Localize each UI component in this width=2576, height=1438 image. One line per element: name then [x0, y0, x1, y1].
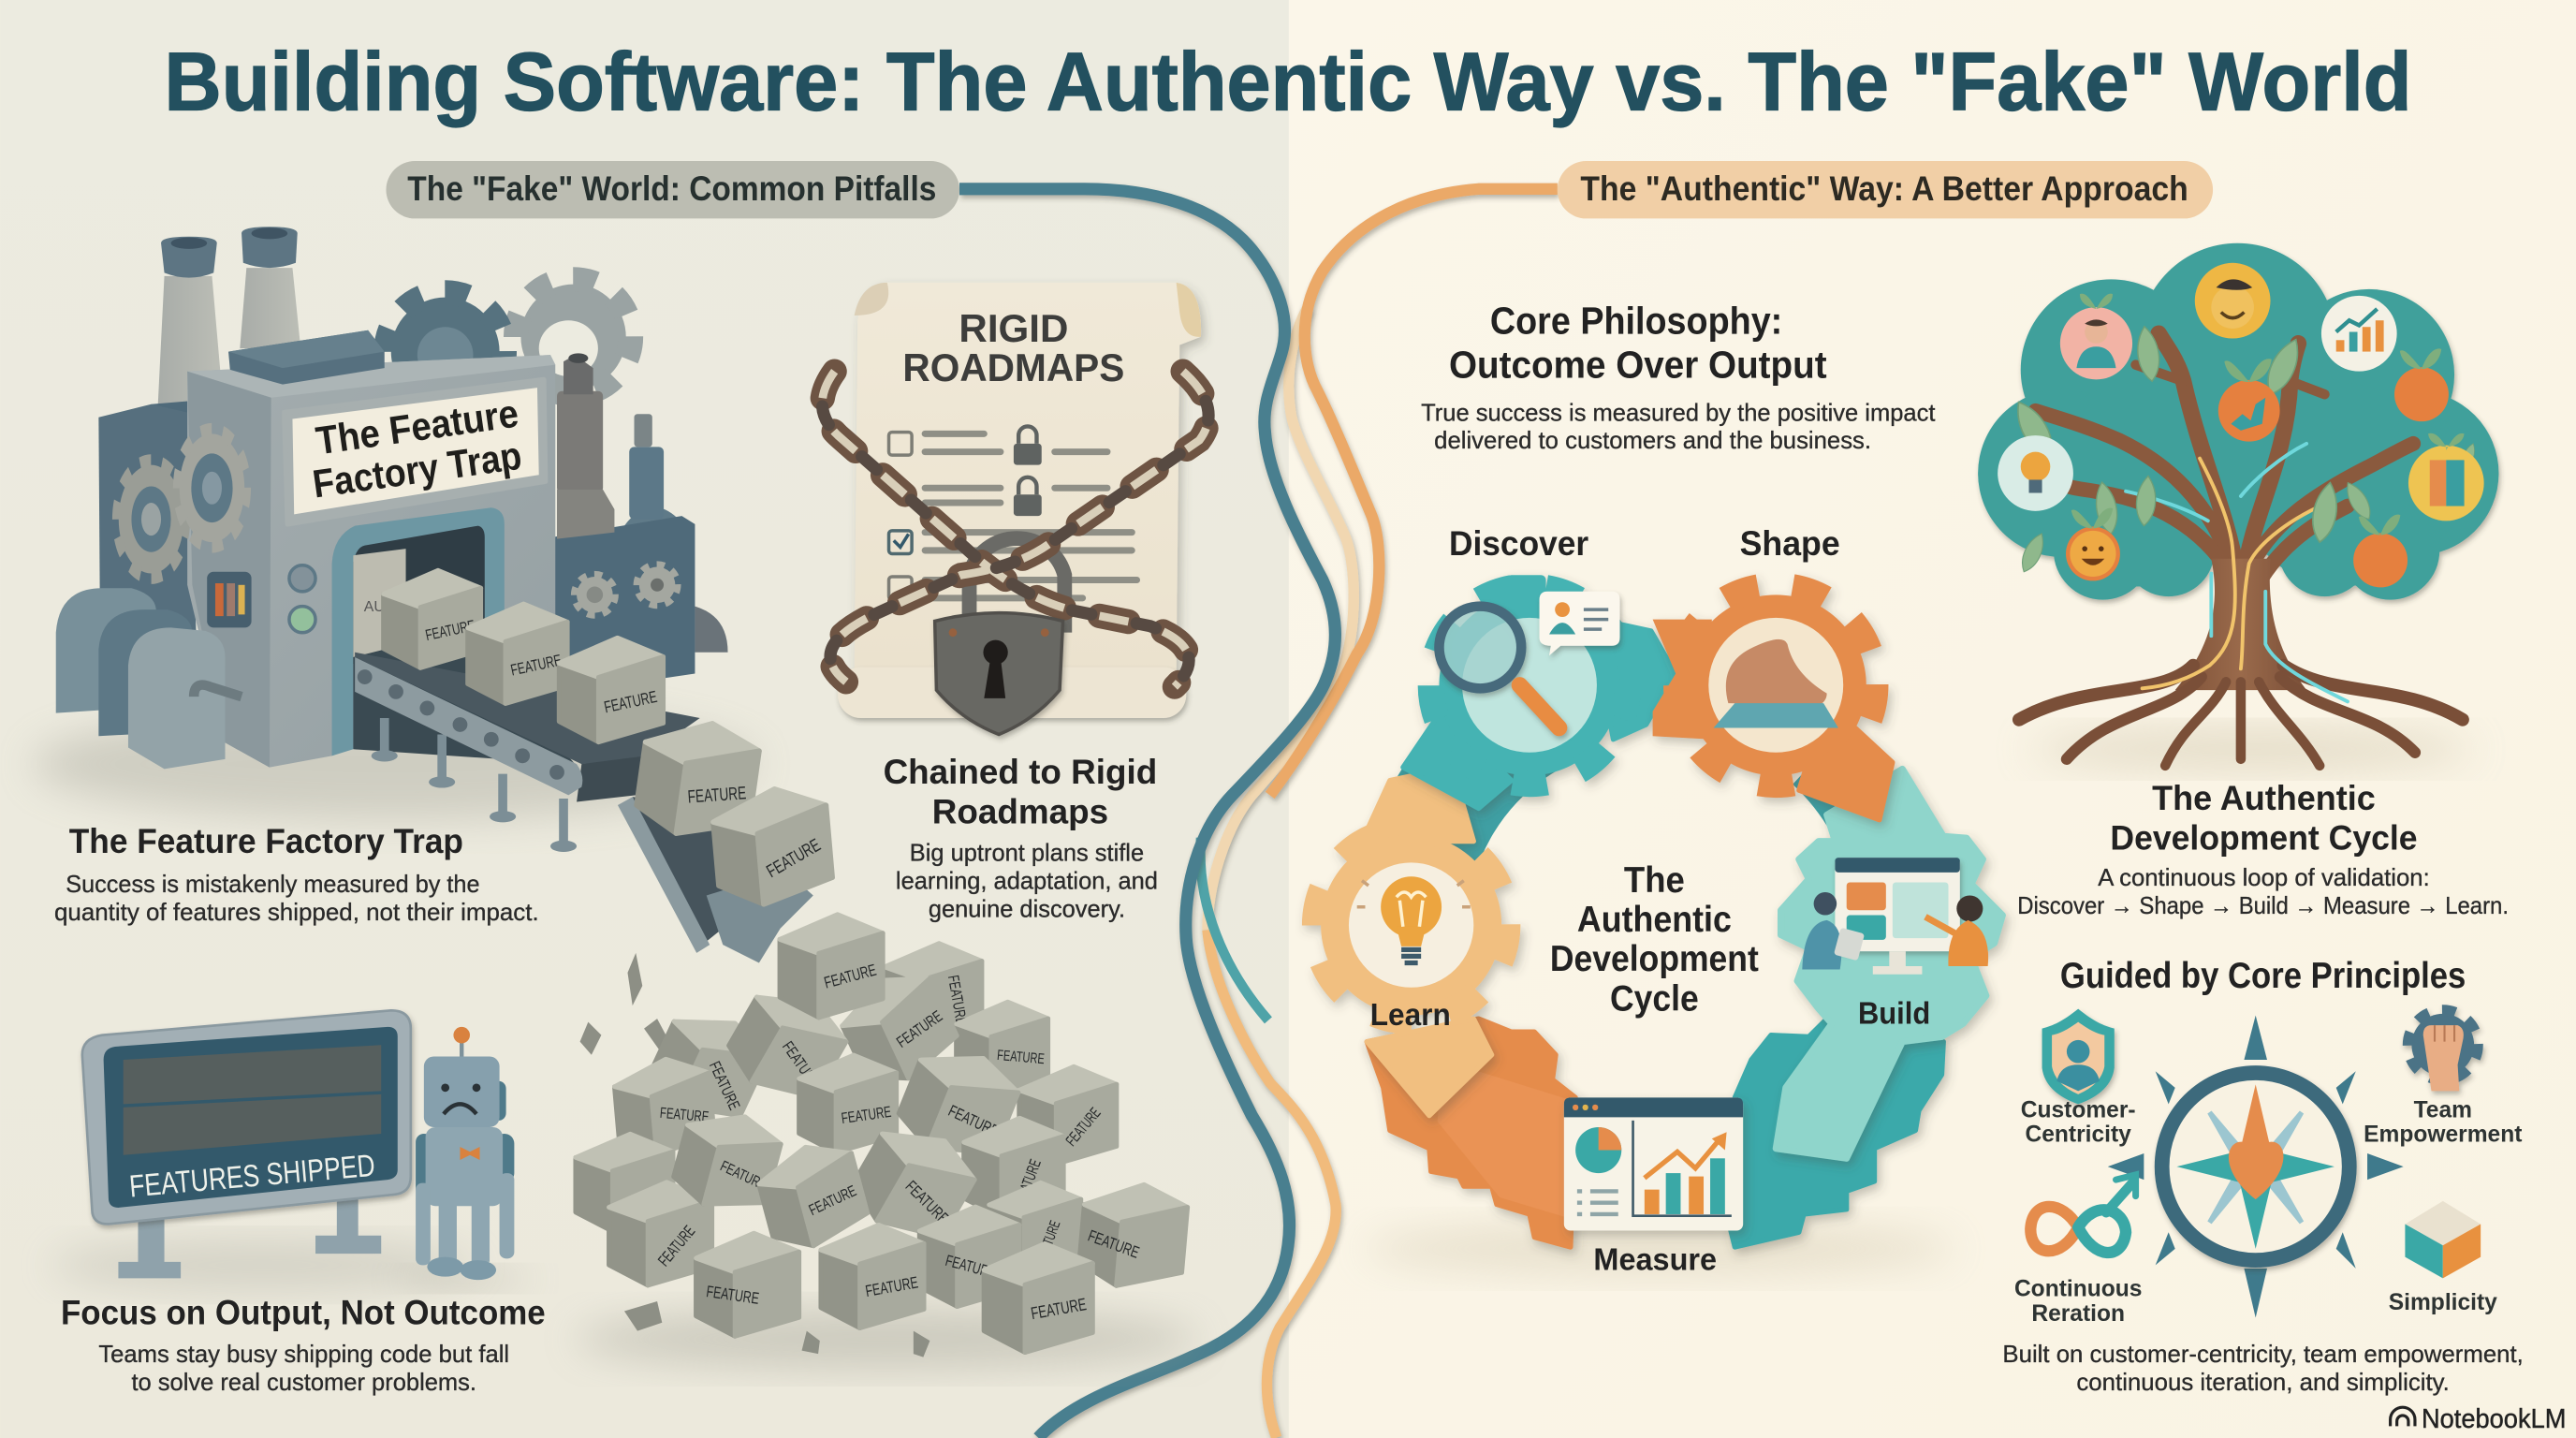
cube: FEATURE — [944, 1252, 998, 1282]
cube — [1077, 1180, 1189, 1291]
cube: FEATURE — [718, 1158, 769, 1194]
label: customer centricity: Customer- — [2021, 1097, 2136, 1123]
illustration: features shipped board — [50, 1010, 476, 1290]
cube — [885, 944, 982, 1041]
body: focus on output: Teams stay busy shipping code but fall — [98, 1342, 509, 1368]
tree leaves — [2009, 325, 2478, 575]
cube — [576, 1134, 673, 1231]
body: core philosophy: True success is measured by the positive impact — [1421, 400, 1935, 426]
back gears — [386, 279, 631, 411]
fruit: light bulb — [1998, 435, 2073, 511]
cube — [668, 1103, 785, 1220]
cube: FEATURE — [659, 1105, 710, 1125]
cube: FEATURE — [1062, 1104, 1105, 1150]
cube — [642, 1000, 775, 1132]
gear: build — [1776, 769, 2002, 1158]
board caption: FEATURES SHIPPED — [128, 1149, 376, 1205]
cube — [696, 1233, 799, 1336]
icon: simplicity cube — [2405, 1201, 2481, 1278]
label: team empowerment: Team — [2414, 1097, 2472, 1123]
cube — [984, 1244, 1092, 1352]
body: focus on output — [98, 1342, 509, 1396]
body: rigid roadmaps: learning, adaptation, and — [896, 868, 1158, 894]
cube: FEATURE — [1030, 1294, 1088, 1323]
cube: FEATURE — [706, 1059, 743, 1113]
factory sign: The Feature — [314, 391, 521, 462]
body: feature factory trap — [54, 872, 539, 926]
heading: core philosophy: Outcome Over Output — [1449, 344, 1827, 387]
cycle centre label: Cycle — [1610, 978, 1699, 1019]
illustration: sad robot — [400, 1027, 531, 1288]
cube: FEATURE — [996, 1048, 1045, 1067]
factory sign: Factory Trap — [310, 433, 524, 506]
cube: FEATURE — [779, 1038, 823, 1091]
heading: focus on output: Focus on Output, Not Outcome — [61, 1294, 546, 1332]
falling cube — [710, 785, 834, 908]
label: build: Build — [1858, 996, 1930, 1031]
debris — [580, 953, 929, 1357]
heading: authentic development cycle: Development Cycle — [2110, 818, 2418, 857]
cycle centre label: Development — [1550, 939, 1759, 979]
shackle — [970, 538, 1064, 633]
body: authentic development cycle — [2017, 865, 2509, 919]
illustration: feature factory — [33, 227, 755, 852]
conveyor belt — [355, 653, 700, 852]
gear: learn — [1316, 768, 1506, 1116]
cube on belt — [559, 638, 664, 742]
heading pill: fake world — [386, 161, 959, 218]
label: team empowerment — [2364, 1097, 2522, 1148]
ring base — [1412, 723, 1935, 929]
body: focus on output: to solve real customer problems. — [131, 1370, 476, 1396]
heading pill: authentic way — [1558, 161, 2213, 218]
cube: FEATURE — [893, 1007, 945, 1051]
cube — [1019, 1066, 1117, 1164]
cube — [799, 1055, 897, 1152]
body: feature factory trap: Success is mistakenly measured by the — [66, 872, 480, 898]
falling cube: FEATURE — [687, 783, 747, 808]
fruit: smiling customer — [2195, 263, 2271, 339]
cube on belt: FEATURE — [602, 687, 659, 716]
fruit: plain orange — [2394, 348, 2449, 421]
label: shape: Shape — [1740, 524, 1840, 563]
notebooklm logo: NotebookLM — [2422, 1404, 2566, 1434]
gear: discover — [1403, 575, 1676, 808]
checklist rows — [889, 431, 1140, 601]
body: rigid roadmaps: genuine discovery. — [929, 896, 1125, 922]
gear: shape — [1653, 587, 1893, 820]
tree canopy — [1978, 243, 2498, 600]
icon: customer shield — [2042, 1009, 2115, 1104]
heading: authentic development cycle — [2110, 779, 2418, 857]
cube — [891, 1036, 1025, 1171]
cube on belt — [384, 570, 481, 668]
connector: pale tan curve — [1208, 307, 1354, 930]
heading: guided by core principles: Guided by Core Principles — [2060, 956, 2466, 996]
label: measure: Measure — [1593, 1243, 1717, 1278]
small lock icons — [1014, 426, 1042, 516]
icon: continuous iteration infinity — [2030, 1175, 2136, 1253]
falling cube: FEATURE — [763, 835, 825, 882]
background: fake world half — [0, 0, 1289, 1438]
cube: FEATURE — [841, 1103, 892, 1127]
cube — [832, 961, 964, 1094]
illustration: rigid roadmap scroll — [822, 283, 1208, 734]
top block — [228, 330, 385, 385]
heading: core philosophy: Core Philosophy: — [1490, 299, 1782, 342]
body: principles summary: Built on customer-centricity, team empowerment, — [2002, 1342, 2524, 1368]
title: Building Software: The Authentic Way vs. The "Fake" World — [165, 37, 2411, 128]
side block — [98, 404, 198, 657]
cube on belt — [468, 604, 567, 704]
tree roots — [2019, 666, 2463, 766]
icon: magnifier and profile bubble — [1439, 592, 1620, 727]
body: core philosophy: delivered to customers and the business. — [1434, 428, 1871, 454]
background: authentic way half — [1289, 0, 2576, 1438]
ring segment: teal lower right — [1730, 1019, 1943, 1247]
icon: monitor and team — [1802, 858, 1988, 975]
icon: clay blob — [1714, 639, 1838, 727]
fruit: growth chart — [2321, 296, 2397, 372]
cube — [609, 1182, 712, 1285]
heading: chained to rigid roadmaps: Roadmaps — [932, 792, 1108, 830]
arches — [56, 588, 242, 769]
fruit: customer person — [2060, 294, 2132, 379]
roadmap title line two: ROADMAPS — [902, 345, 1124, 389]
cube — [612, 1055, 716, 1159]
padlock — [935, 613, 1063, 734]
connector: teal sliver — [1200, 838, 1268, 1020]
label: continuous reration: Continuous — [2014, 1277, 2142, 1302]
heading: feature factory trap: The Feature Factory Trap — [69, 822, 463, 860]
label: discover: Discover — [1449, 524, 1588, 563]
cycle centre label: The — [1624, 860, 1685, 901]
cube — [988, 1182, 1081, 1274]
label: customer centricity — [2021, 1097, 2136, 1148]
cube: FEATURE — [705, 1282, 760, 1308]
right pipes and block — [552, 353, 728, 690]
cube — [753, 1136, 872, 1255]
cube — [964, 1118, 1063, 1218]
illustration: growth tree — [1978, 243, 2498, 769]
illustration: compass — [2108, 1016, 2404, 1318]
factory door — [332, 507, 575, 764]
cube — [780, 915, 883, 1018]
cycle centre label — [1550, 860, 1759, 1019]
cube — [843, 1112, 984, 1253]
tree trunk — [2175, 559, 2306, 690]
indicator panel and buttons — [207, 565, 315, 633]
cube on belt: FEATURE — [509, 652, 564, 680]
body: authentic development cycle: Discover → Shape → Build → Measure → Learn. — [2017, 893, 2509, 919]
chains — [822, 372, 1208, 687]
icon: measure dashboard card — [1564, 1097, 1743, 1231]
cube: FEATURE — [1086, 1226, 1142, 1262]
roadmap title: RIGID — [959, 306, 1068, 350]
heading pill: authentic way: The "Authentic" Way: A Better Approach — [1580, 169, 2188, 208]
body: principles summary — [2002, 1342, 2524, 1396]
cube: FEATURE — [944, 974, 971, 1026]
fruit: smiling pumpkin — [2066, 508, 2120, 580]
label: team empowerment: Empowerment — [2364, 1123, 2522, 1148]
label: learn: Learn — [1370, 998, 1451, 1033]
cube — [719, 976, 856, 1112]
cube: FEATURE — [1034, 1219, 1064, 1264]
body: rigid roadmaps: Big uptront plans stifle — [910, 841, 1144, 867]
label: continuous reration — [2014, 1277, 2142, 1327]
cycle centre label: Authentic — [1577, 900, 1732, 940]
cube on belt: FEATURE — [424, 616, 476, 644]
fruit: orange map — [2218, 359, 2280, 442]
tree branches — [2036, 333, 2413, 592]
falling cube — [634, 714, 762, 844]
ring segment: orange bottom left — [1367, 1019, 1575, 1247]
illustration: feature cube pile — [575, 915, 1199, 1369]
cube: FEATURE — [945, 1101, 1002, 1140]
heading: core philosophy — [1449, 299, 1827, 387]
compass points — [2108, 1016, 2404, 1318]
fruit: puzzle — [2408, 433, 2484, 521]
heading pill: fake world: The "Fake" World: Common Pitfalls — [407, 169, 936, 208]
factory door: AUR — [364, 599, 395, 615]
illustration: chute with falling cubes — [618, 714, 834, 962]
label: simplicity: Simplicity — [2389, 1290, 2497, 1315]
label: continuous reration: Reration — [2031, 1301, 2125, 1327]
body: feature factory trap: quantity of features shipped, not their impact. — [54, 900, 539, 926]
icon: light bulb — [1357, 876, 1471, 962]
heading: authentic development cycle: The Authentic — [2152, 779, 2376, 817]
side gears — [117, 431, 246, 577]
tree glow lines — [2126, 444, 2348, 701]
connector: orange curve — [1270, 189, 1558, 795]
cube — [919, 1207, 1019, 1307]
connector: lower tan orange curve — [1208, 930, 1336, 1438]
cube: FEATURE — [902, 1177, 953, 1227]
fruit: bottom orange — [2353, 515, 2408, 587]
machine body — [187, 355, 555, 768]
cube — [956, 1002, 1048, 1093]
body: rigid roadmaps — [896, 841, 1158, 922]
cube: FEATURE — [806, 1181, 859, 1219]
label: customer centricity: Centricity — [2026, 1123, 2131, 1148]
heading: chained to rigid roadmaps: Chained to Rigid — [884, 753, 1157, 791]
diagram: authentic development cycle ring — [1316, 575, 2002, 1275]
cube: FEATURE — [864, 1272, 919, 1300]
chimneys — [152, 227, 300, 431]
compass star — [2176, 1084, 2334, 1249]
cube: FEATURE — [822, 961, 878, 992]
factory sign — [285, 379, 546, 524]
icon: team fist gear — [2408, 1010, 2478, 1091]
body: core philosophy — [1421, 400, 1935, 454]
cube — [821, 1225, 924, 1328]
cube: FEATURE — [1013, 1157, 1045, 1206]
heading: chained to rigid roadmaps — [884, 753, 1157, 830]
body: authentic development cycle: A continuous loop of validation: — [2098, 865, 2430, 891]
body: principles summary: continuous iteration, and simplicity. — [2076, 1370, 2450, 1396]
cube: FEATURE — [654, 1222, 698, 1269]
connector: teal curve — [959, 189, 1335, 1438]
